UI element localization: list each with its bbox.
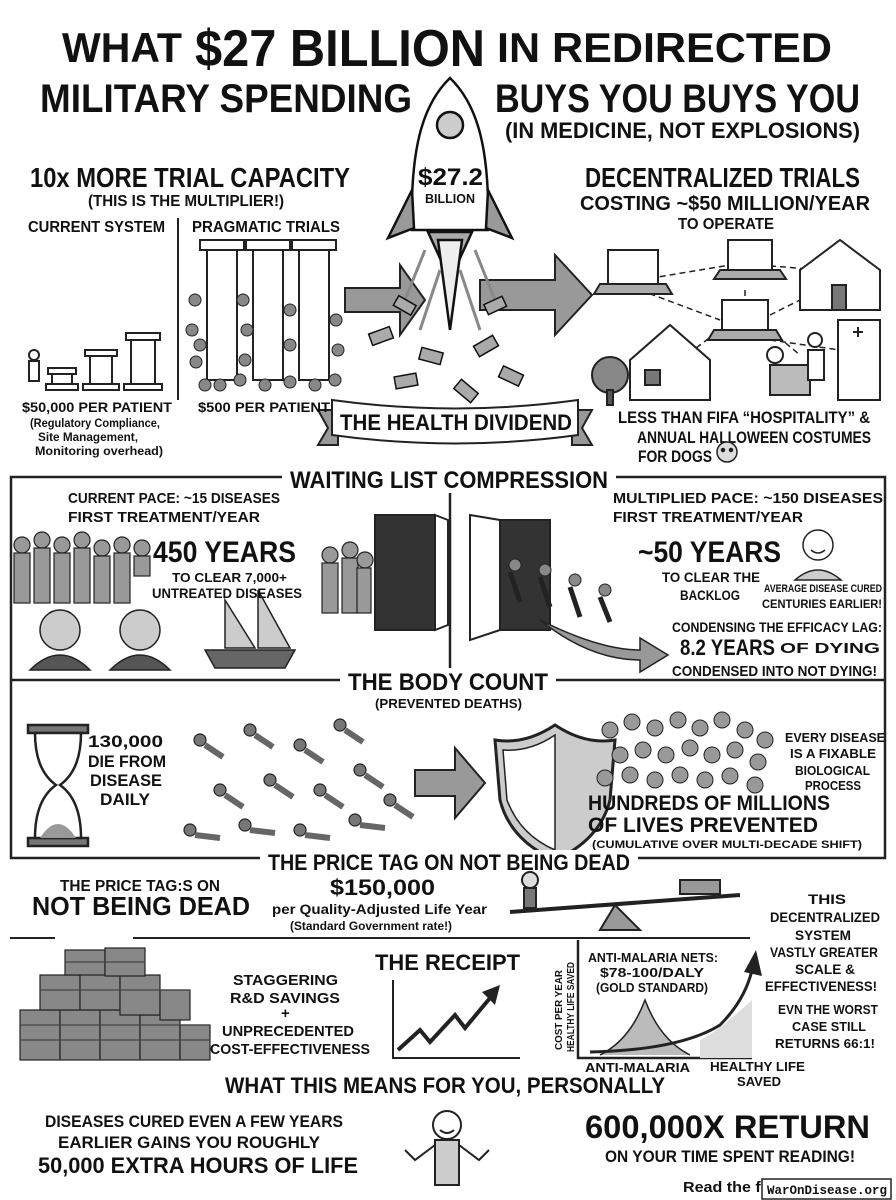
panel: body count: (CUMULATIVE OVER MULTI-DECADE SHIFT) xyxy=(592,839,862,851)
text: extra hours: DISEASES CURED EVEN A FEW YEARS xyxy=(45,1112,343,1131)
panel: current pace: FIRST TREATMENT/YEAR xyxy=(68,509,260,526)
chart: cost-effectiveness curve: ANTI-MALARIA NETS: xyxy=(588,950,718,965)
icon: open door with runners xyxy=(470,515,611,640)
heading: body count: (PREVENTED DEATHS) xyxy=(375,696,522,711)
chart: cost-effectiveness curve: COST PER YEAR xyxy=(554,969,565,1050)
heading: body count xyxy=(340,668,556,711)
text: 600,000x return: ON YOUR TIME SPENT READING! xyxy=(605,1147,855,1166)
callout: decentralized system: VASTLY GREATER xyxy=(770,944,878,960)
chart: cost-effectiveness curve: (GOLD STANDARD) xyxy=(596,980,708,995)
title: $27 BILLION xyxy=(195,20,485,78)
panel: body count: PROCESS xyxy=(805,778,861,793)
chart: the receipt xyxy=(375,950,521,1058)
panel: decentralized trials xyxy=(580,162,880,466)
text: extra hours: EARLIER GAINS YOU ROUGHLY xyxy=(58,1133,321,1152)
arrow: efficacy lag xyxy=(540,620,668,672)
subtitle: (IN MEDICINE, NOT EXPLOSIONS) xyxy=(505,118,860,143)
panel: body count: EVERY DISEASE xyxy=(785,730,885,745)
panel: price tag: per Quality-Adjusted Life Year xyxy=(272,901,488,917)
panel: body count: IS A FIXABLE xyxy=(790,746,876,761)
callout: decentralized system: EVN THE WORST xyxy=(778,1002,878,1017)
icon: falling figures xyxy=(184,719,413,838)
panel: current pace xyxy=(14,490,448,670)
panel: multiplied pace: FIRST TREATMENT/YEAR xyxy=(613,509,803,526)
text: R&D savings: STAGGERING xyxy=(233,972,338,989)
text: R&D savings xyxy=(210,972,370,1058)
heading: price tag: THE PRICE TAG ON NOT BEING DEAD xyxy=(268,850,630,875)
panel: current pace: 450 YEARS xyxy=(153,536,296,569)
panel: trial capacity: Site Management, xyxy=(38,430,138,444)
icon: queue of people xyxy=(14,532,373,613)
icon: historical portraits xyxy=(30,610,170,670)
title: IN REDIRECTED xyxy=(497,24,832,71)
callout: decentralized system xyxy=(765,891,880,1051)
callout: decentralized system: CASE STILL xyxy=(792,1019,866,1034)
panel: current pace: TO CLEAR 7,000+ xyxy=(172,570,287,585)
icon: shield xyxy=(495,725,615,860)
text: extra hours xyxy=(38,1112,358,1178)
icon: dog xyxy=(717,442,737,462)
panel: decentralized trials: FOR DOGS xyxy=(638,447,712,466)
callout: decentralized system: DECENTRALIZED xyxy=(770,909,880,925)
panel: multiplied pace: MULTIPLIED PACE: ~150 DISEASES xyxy=(613,490,883,507)
panel: trial capacity: 10x MORE TRIAL CAPACITY xyxy=(30,162,350,193)
panel: trial capacity: Monitoring overhead) xyxy=(35,444,163,458)
heading: body count: THE BODY COUNT xyxy=(348,669,548,696)
panel: multiplied pace: ~50 YEARS xyxy=(638,536,781,569)
panel: multiplied pace: CONDENSED INTO NOT DYING! xyxy=(672,663,877,680)
panel: multiplied pace: OF DYING xyxy=(780,640,880,657)
panel: trial capacity: $500 PER PATIENT xyxy=(198,399,330,415)
chart: cost-effectiveness curve: ANTI-MALARIA xyxy=(585,1060,691,1075)
chart: cost-effectiveness curve: SAVED xyxy=(737,1074,781,1089)
panel: multiplied pace: CENTURIES EARLIER! xyxy=(762,597,882,611)
text: 600,000x return xyxy=(585,1109,870,1166)
icon: money stacks xyxy=(20,948,210,1060)
callout: decentralized system: THIS xyxy=(808,891,846,907)
icon: small pillars xyxy=(29,333,162,390)
panel: multiplied pace: BACKLOG xyxy=(680,587,740,603)
panel: current pace: UNTREATED DISEASES xyxy=(152,585,302,601)
panel: trial capacity: (THIS IS THE MULTIPLIER!) xyxy=(88,193,284,210)
chart: the receipt: THE RECEIPT xyxy=(375,950,521,975)
panel: multiplied pace: TO CLEAR THE xyxy=(662,569,760,585)
title: WHAT xyxy=(62,24,182,71)
panel: price tag: THE PRICE TAG:S ON xyxy=(60,878,220,895)
text: extra hours: 50,000 EXTRA HOURS OF LIFE xyxy=(38,1153,358,1178)
chart: cost-effectiveness curve: HEALTHY LIFE xyxy=(710,1059,805,1074)
icon: network xyxy=(592,240,880,405)
callout: decentralized system: SCALE & xyxy=(795,961,855,977)
icon: rocket: BILLION xyxy=(425,191,475,206)
text: R&D savings: COST-EFFECTIVENESS xyxy=(210,1041,370,1058)
icon: rocket: $27.2 xyxy=(418,164,483,191)
title: MILITARY SPENDING xyxy=(40,77,412,121)
chart: cost-effectiveness curve: HEALTHY LIFE SAVED xyxy=(566,962,577,1052)
icon: smiling man xyxy=(795,530,841,580)
callout: decentralized system: EFFECTIVENESS! xyxy=(765,978,877,994)
panel: trial capacity: CURRENT SYSTEM xyxy=(28,219,165,236)
text: 600,000x return: 600,000X RETURN xyxy=(585,1109,870,1145)
panel: body count: DIE FROM xyxy=(88,752,166,771)
heading: personally: WHAT THIS MEANS FOR YOU, PERSONALLY xyxy=(225,1073,665,1098)
panel: body count xyxy=(28,712,885,860)
arrow: right big arrow xyxy=(480,255,592,335)
callout: decentralized system: RETURNS 66:1! xyxy=(775,1036,875,1051)
callout: decentralized system: SYSTEM xyxy=(795,927,851,943)
text: R&D savings: R&D SAVINGS xyxy=(230,990,340,1007)
panel: body count: HUNDREDS OF MILLIONS xyxy=(588,792,830,815)
panel: trial capacity: $50,000 PER PATIENT xyxy=(22,399,172,415)
panel: decentralized trials: TO OPERATE xyxy=(678,216,774,233)
banner: the health dividend: THE HEALTH DIVIDEND xyxy=(340,410,572,435)
panel: current pace: CURRENT PACE: ~15 DISEASES xyxy=(68,490,280,507)
chart: cost-effectiveness curve xyxy=(554,940,805,1089)
panel: price tag xyxy=(32,872,740,933)
panel: decentralized trials: COSTING ~$50 MILLION/YEAR xyxy=(580,193,871,215)
heading: waiting list compression: WAITING LIST COMPRESSION xyxy=(290,467,608,494)
panel: price tag: (Standard Government rate!) xyxy=(290,919,452,933)
icon: ship xyxy=(205,590,295,668)
text: R&D savings: + xyxy=(281,1005,290,1022)
icon: seesaw xyxy=(510,872,740,930)
panel: body count: 130,000 xyxy=(88,732,163,751)
title xyxy=(40,20,860,121)
panel: multiplied pace xyxy=(470,490,883,680)
chart: cost-effectiveness curve: $78-100/DALY xyxy=(600,965,704,980)
arrow: body count xyxy=(415,748,485,818)
panel: price tag: NOT BEING DEAD xyxy=(32,891,250,921)
icon: rocket xyxy=(369,78,524,403)
panel: body count: OF LIVES PREVENTED xyxy=(588,814,818,837)
panel: body count: DAILY xyxy=(100,790,151,809)
icon: shrugging man xyxy=(405,1111,489,1185)
footer: read more: WarOnDisease.org xyxy=(767,1183,887,1198)
footer: read more: Read the full analysis → xyxy=(683,1179,868,1196)
icon: tall pillars with crowd xyxy=(186,240,344,391)
panel: multiplied pace: 8.2 YEARS xyxy=(680,635,775,660)
panel: price tag: $150,000 xyxy=(330,875,435,900)
icon: door closed xyxy=(375,515,448,630)
panel: trial capacity: (Regulatory Compliance, xyxy=(30,416,160,430)
panel: trial capacity: PRAGMATIC TRIALS xyxy=(192,219,340,236)
arrow: left big arrow xyxy=(345,265,425,335)
text: R&D savings: UNPRECEDENTED xyxy=(222,1023,354,1040)
icon: celebrating crowd xyxy=(597,712,773,793)
banner: the health dividend xyxy=(318,400,592,445)
panel: trial capacity xyxy=(22,162,350,458)
frame: waiting list and body count box xyxy=(11,477,885,858)
panel: body count: DISEASE xyxy=(90,771,162,790)
icon: hourglass xyxy=(28,725,88,846)
panel: body count: BIOLOGICAL xyxy=(795,763,870,778)
